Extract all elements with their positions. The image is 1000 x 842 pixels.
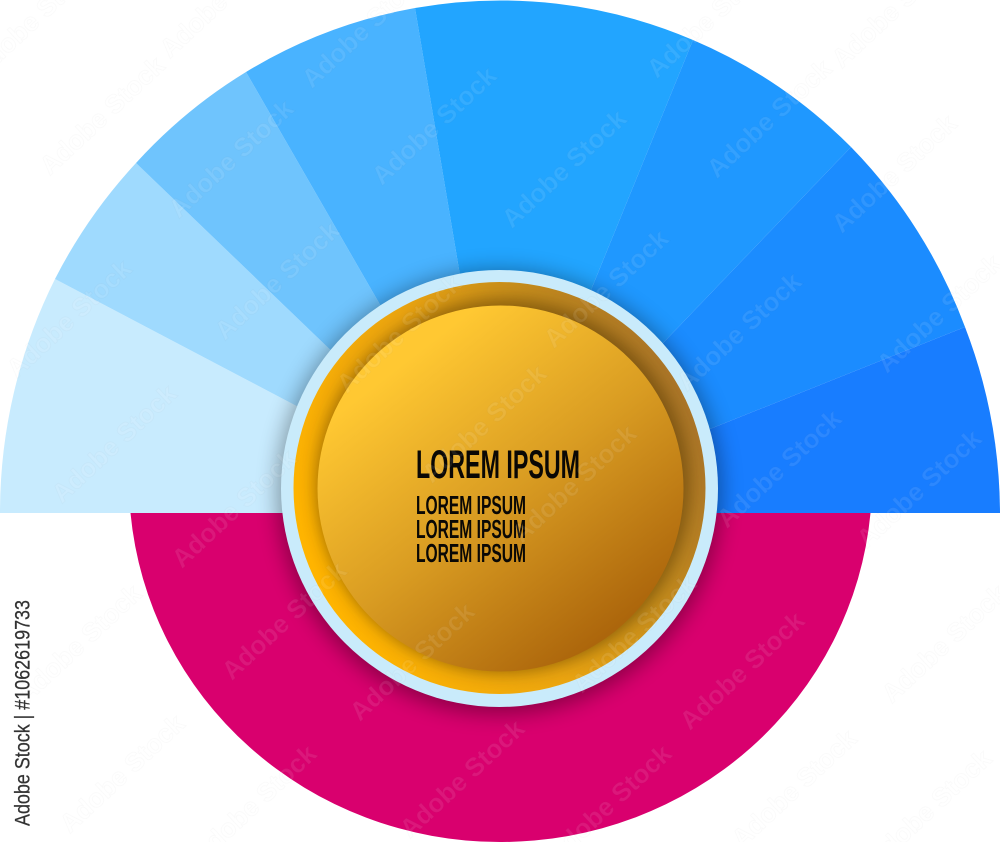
fan segment 8 [500, 327, 1000, 513]
watermarks: Adobe Stock [163, 93, 300, 224]
watermarks: Adobe Stock [216, 555, 353, 686]
center text block [416, 443, 580, 568]
watermarks: Adobe Stock [701, 53, 838, 184]
watermarks: Adobe Stock [538, 223, 675, 354]
watermarks: Adobe Stock [11, 578, 148, 709]
watermarks: Adobe Stock [416, 358, 553, 489]
text line 3: LOREM IPSUM [416, 538, 526, 568]
panel: blue fan [0, 0, 1000, 513]
panel: pink lower half ring [130, 513, 870, 842]
disc shadow [316, 299, 690, 673]
outer pale ring [281, 270, 718, 707]
watermarks: Adobe Stock [674, 605, 811, 736]
fan segment 7 [500, 147, 965, 513]
fan segment 3 [136, 72, 500, 513]
watermarks: Adobe Stock [34, 50, 171, 181]
watermarks: Adobe Stock [166, 443, 303, 574]
fan segment 4 [246, 8, 500, 513]
gold ring [294, 282, 706, 694]
fan segment 1 [0, 279, 500, 513]
gold disc [318, 306, 684, 672]
fan segment 5 [415, 0, 693, 513]
watermarks: Adobe Stock [344, 596, 481, 727]
watermarks: Adobe Stock [331, 268, 468, 399]
watermarks: Adobe Stock [209, 215, 346, 346]
watermarks: Adobe Stock [394, 713, 531, 842]
watermarks: Adobe Stock [366, 60, 503, 191]
watermarks: Adobe Stock [1, 253, 138, 384]
text line 2: LOREM IPSUM [416, 514, 526, 544]
watermarks: Adobe Stock [826, 108, 963, 239]
watermarks: Adobe Stock [506, 418, 643, 549]
watermarks: Adobe Stock [496, 103, 633, 234]
fan segment 6 [500, 40, 851, 513]
stock id text: Adobe Stock | #1062619733 [12, 600, 34, 826]
heading: LOREM IPSUM [416, 443, 580, 487]
watermarks: Adobe Stock [46, 378, 183, 509]
watermarks: Adobe Stock [711, 403, 848, 534]
ring shadow [278, 270, 722, 714]
watermarks: Adobe Stock [566, 568, 703, 699]
fan segment 2 [55, 163, 500, 513]
watermarks: Adobe Stock [851, 423, 988, 554]
text line 1: LOREM IPSUM [416, 490, 526, 520]
watermarks: Adobe Stock [54, 708, 191, 839]
watermarks: Adobe Stock [671, 266, 808, 397]
